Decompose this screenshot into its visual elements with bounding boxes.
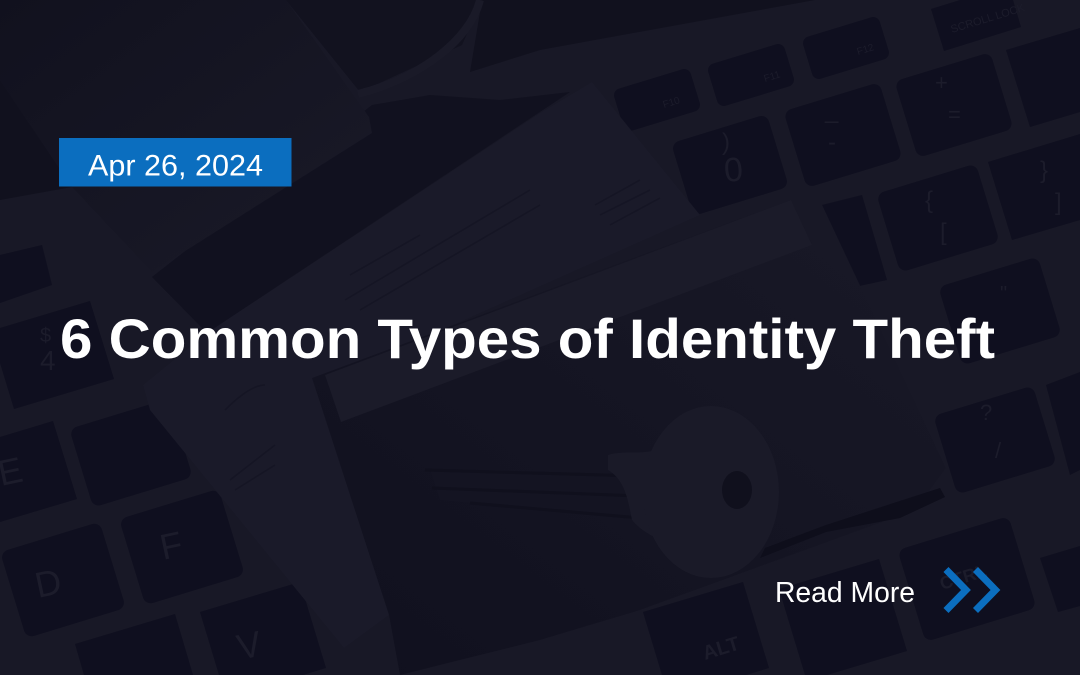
key legends: F11 — [763, 69, 782, 85]
date badge — [59, 138, 292, 186]
key hole — [722, 471, 752, 509]
key legends: V — [233, 623, 265, 668]
key legends: 0 — [722, 150, 745, 190]
title: 6 Common Types of Identity Theft — [60, 307, 995, 370]
key shoulder — [608, 450, 660, 540]
read more text: Read More — [775, 577, 915, 609]
laptop dark mesh left of padlock — [0, 80, 72, 200]
key legends: " — [1000, 283, 1007, 305]
area inside shackle — [286, 0, 482, 92]
key legends: ? — [980, 400, 992, 425]
key legends: 4 — [40, 345, 56, 376]
second card body — [312, 190, 946, 675]
padlock body — [0, 0, 372, 272]
key blade — [430, 470, 650, 520]
key legends: F12 — [856, 42, 876, 58]
key legends: } — [1040, 157, 1048, 184]
dark area between padlock and receipt — [152, 92, 570, 333]
key legends: [ — [940, 219, 947, 246]
house key — [425, 406, 779, 578]
date text: Apr 26, 2024 — [88, 150, 263, 182]
receipt printed marks — [225, 180, 660, 490]
laptop dark mesh strip — [470, 0, 815, 72]
icon: double chevron arrow — [946, 570, 996, 610]
padlock shackle — [358, 0, 480, 94]
key legends: SCROLL LOCK — [949, 2, 1027, 36]
key legends: _ — [824, 97, 839, 124]
receipt card — [143, 82, 700, 648]
key legends: F — [156, 523, 186, 568]
read more link — [775, 570, 996, 610]
key legends: D — [31, 560, 65, 606]
key legends: - — [828, 129, 836, 156]
key legends: ) — [722, 129, 730, 156]
card magnetic stripe — [325, 200, 812, 422]
shadow under card — [760, 488, 945, 558]
key legends: CTRL — [937, 561, 989, 594]
key legends: = — [948, 102, 961, 127]
key legends: ] — [1055, 189, 1062, 216]
key legends: + — [935, 70, 948, 95]
key legends: ALT — [700, 633, 742, 665]
key head — [643, 406, 779, 578]
key legends: $ — [40, 325, 51, 347]
key legends: { — [925, 187, 933, 214]
key legends: / — [995, 438, 1002, 463]
key legends: F10 — [662, 95, 682, 111]
